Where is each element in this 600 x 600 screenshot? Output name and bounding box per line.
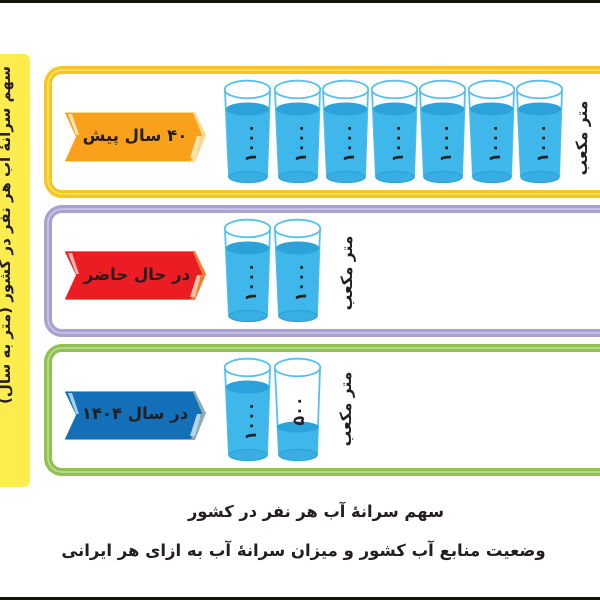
panel: vertical sidebar heading <box>0 54 30 487</box>
glass 3: ۱۰۰۰ <box>339 123 358 163</box>
glass 4: ۱۰۰۰ <box>388 123 407 163</box>
caption title: سهم سرانهٔ آب هر نفر در کشور <box>187 501 444 521</box>
ribbon: 40 years ago <box>65 112 206 162</box>
glass 1: ۱۰۰۰ <box>241 401 260 441</box>
ribbon: 40 years ago: ۴۰ سال پیش <box>83 126 187 146</box>
glass 1 <box>225 359 270 460</box>
glass 2, half full: ۵۰۰ <box>289 396 308 426</box>
glass 2: ۱۰۰۰ <box>291 123 310 163</box>
glass 1 <box>225 81 270 182</box>
glass 3 <box>323 81 368 182</box>
glass 5 <box>420 81 465 182</box>
glass 5: ۱۰۰۰ <box>436 123 455 163</box>
glass 2: ۱۰۰۰ <box>291 262 310 302</box>
glass 2 <box>275 220 320 322</box>
ribbon: year 1404 <box>65 391 206 440</box>
unit label: متر مکعب <box>337 372 355 446</box>
panel: present time <box>48 209 600 333</box>
glass 4 <box>372 81 417 182</box>
panel: year 1404 <box>48 348 600 472</box>
unit label: متر مکعب <box>338 236 356 310</box>
top black bar <box>0 0 600 3</box>
ribbon: present time: در حال حاضر <box>83 265 190 285</box>
glass 7 <box>517 81 562 182</box>
unit label: متر مکعب <box>573 101 591 175</box>
ribbon: present time <box>65 251 206 300</box>
glass 1: ۱۰۰۰ <box>241 123 260 163</box>
glass 6 <box>469 81 514 182</box>
glass 7: ۱۰۰۰ <box>533 123 552 163</box>
bottom black bar <box>0 597 600 600</box>
panel: 40 years ago <box>48 70 600 194</box>
ribbon: year 1404: در سال ۱۴۰۴ <box>82 404 188 423</box>
glass 2, half full <box>275 359 320 460</box>
caption subtitle: وضعیت منابع آب کشور و میزان سرانهٔ آب به ازای هر ایرانی <box>61 539 546 561</box>
glass 1: ۱۰۰۰ <box>241 262 260 302</box>
glass 2 <box>275 81 320 182</box>
glass 1 <box>225 220 270 322</box>
glass 6: ۱۰۰۰ <box>485 123 504 163</box>
